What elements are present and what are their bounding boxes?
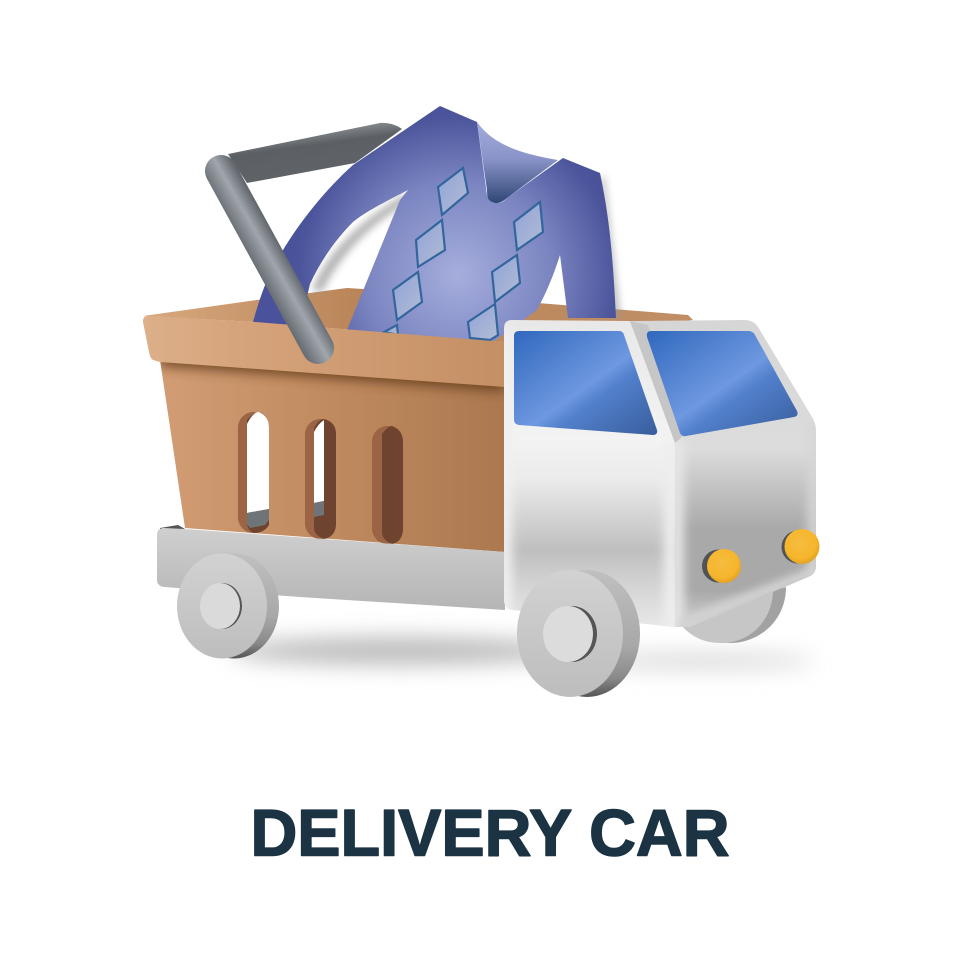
- sweater: [253, 106, 620, 342]
- handle side bar: [221, 171, 318, 348]
- sweater pattern: [384, 168, 543, 340]
- windshield right: [647, 331, 798, 436]
- sweater cast shadow: [312, 175, 620, 318]
- truck bed: [157, 525, 505, 610]
- truck cab: [498, 316, 820, 632]
- basket body: [160, 350, 505, 552]
- cab pillar: [630, 321, 682, 443]
- cab right face: [625, 316, 820, 632]
- ground shadow: [230, 637, 815, 670]
- illustration canvas: [143, 106, 820, 857]
- basket slot 2: [305, 419, 336, 539]
- basket front rim: [143, 316, 505, 387]
- handle top bar: [228, 123, 402, 183]
- front wheel: [517, 570, 640, 697]
- windshield left: [514, 331, 657, 435]
- rear wheel: [177, 554, 279, 658]
- title: DELIVERY CAR: [250, 796, 730, 870]
- basket slot 3: [372, 426, 403, 544]
- headlight right: [782, 529, 820, 564]
- basket slot 1: [238, 412, 269, 533]
- basket back rim: [143, 288, 693, 342]
- collar back: [477, 122, 558, 203]
- headlight left: [702, 549, 741, 583]
- far front wheel: [683, 587, 786, 643]
- cab left face: [498, 316, 680, 631]
- sweater shape: [253, 106, 616, 342]
